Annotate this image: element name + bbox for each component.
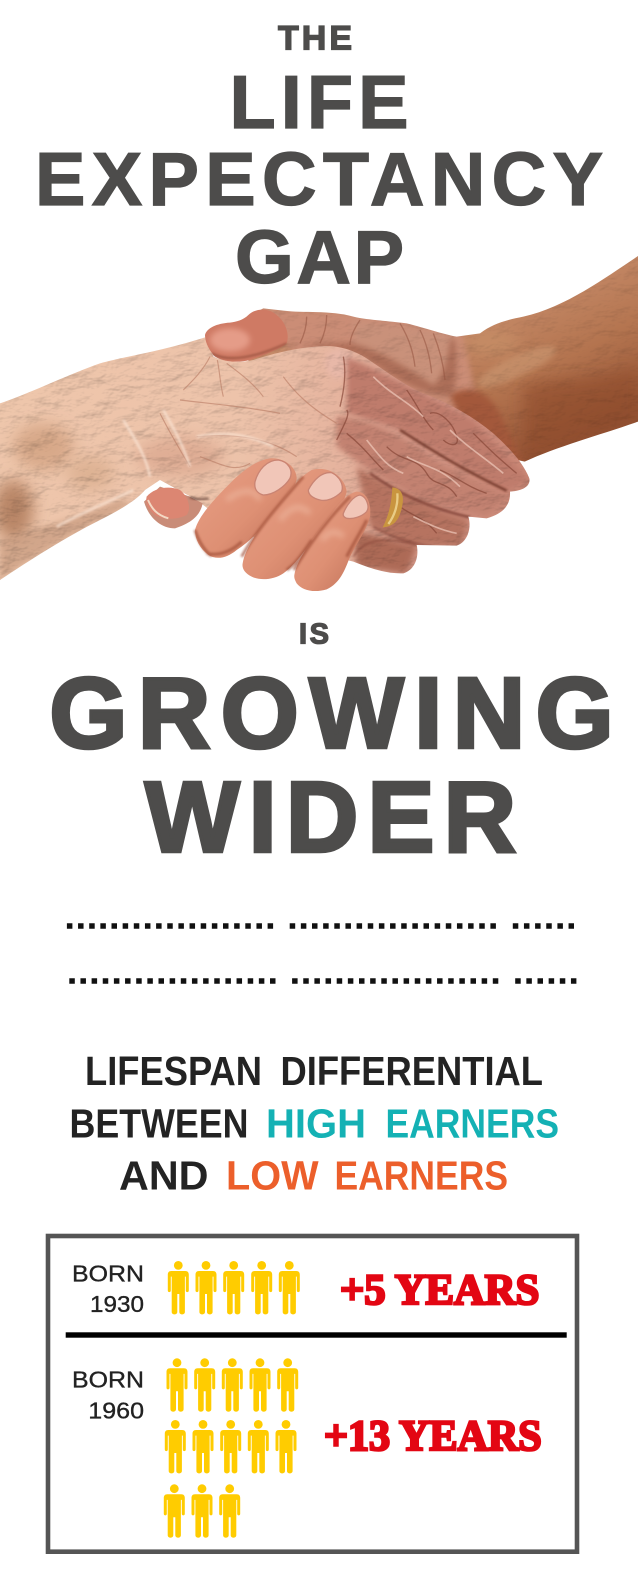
panel: lifespan comparison [48, 1236, 577, 1552]
heading line 3: AND [119, 1152, 208, 1198]
headline: growing wider [50, 658, 614, 874]
headline word: WIDER: WIDER [145, 762, 516, 874]
heading line 3 [119, 1152, 508, 1198]
label: born 1960 [72, 1366, 144, 1423]
fingernails [255, 460, 368, 519]
value: +13 years: +13 YEARS [324, 1413, 542, 1460]
elderly hand and forearm [0, 333, 537, 583]
panel frame [48, 1236, 577, 1552]
heading line 1: DIFFERENTIAL [280, 1048, 543, 1094]
label: born 1930: BORN [72, 1260, 144, 1286]
heading line 1: LIFESPAN [85, 1048, 262, 1094]
subtitle word: IS: IS [299, 618, 329, 650]
lower thumb and fold [144, 487, 208, 528]
title word: GAP: GAP [235, 216, 404, 300]
dotted separator rows [67, 926, 576, 981]
heading line 2: EARNERS [386, 1100, 559, 1146]
title [35, 19, 603, 300]
photo: two hands clasped in a handshake [0, 250, 638, 591]
headline word: GROWING: GROWING [50, 658, 614, 770]
heading line 3: LOW [226, 1152, 319, 1198]
wedding ring [383, 487, 403, 527]
lower fingers [195, 458, 370, 591]
upper thumb [205, 310, 288, 362]
heading line 3: EARNERS [334, 1152, 508, 1198]
title word: EXPECTANCY: EXPECTANCY [35, 138, 603, 222]
icons: 13 people, born 1960 [164, 1358, 298, 1538]
younger right arm and hand [240, 250, 638, 467]
divider between cohorts [66, 1332, 567, 1338]
icons: 5 people, born 1930 [168, 1261, 300, 1314]
heading line 2: BETWEEN [70, 1100, 248, 1146]
heading line 1 [85, 1048, 543, 1094]
label: born 1960: 1960 [88, 1397, 144, 1423]
heading line 2: HIGH [266, 1100, 366, 1146]
wrinkled fingers shading [347, 357, 529, 492]
value: +5 years: +5 YEARS [340, 1267, 539, 1314]
heading line 2 [70, 1100, 559, 1146]
label: born 1930 [72, 1260, 144, 1317]
heading: lifespan differential [70, 1048, 559, 1198]
label: born 1960: BORN [72, 1366, 144, 1392]
label: born 1930: 1930 [90, 1291, 144, 1317]
title word: LIFE: LIFE [230, 61, 408, 145]
title word: THE: THE [278, 19, 352, 57]
